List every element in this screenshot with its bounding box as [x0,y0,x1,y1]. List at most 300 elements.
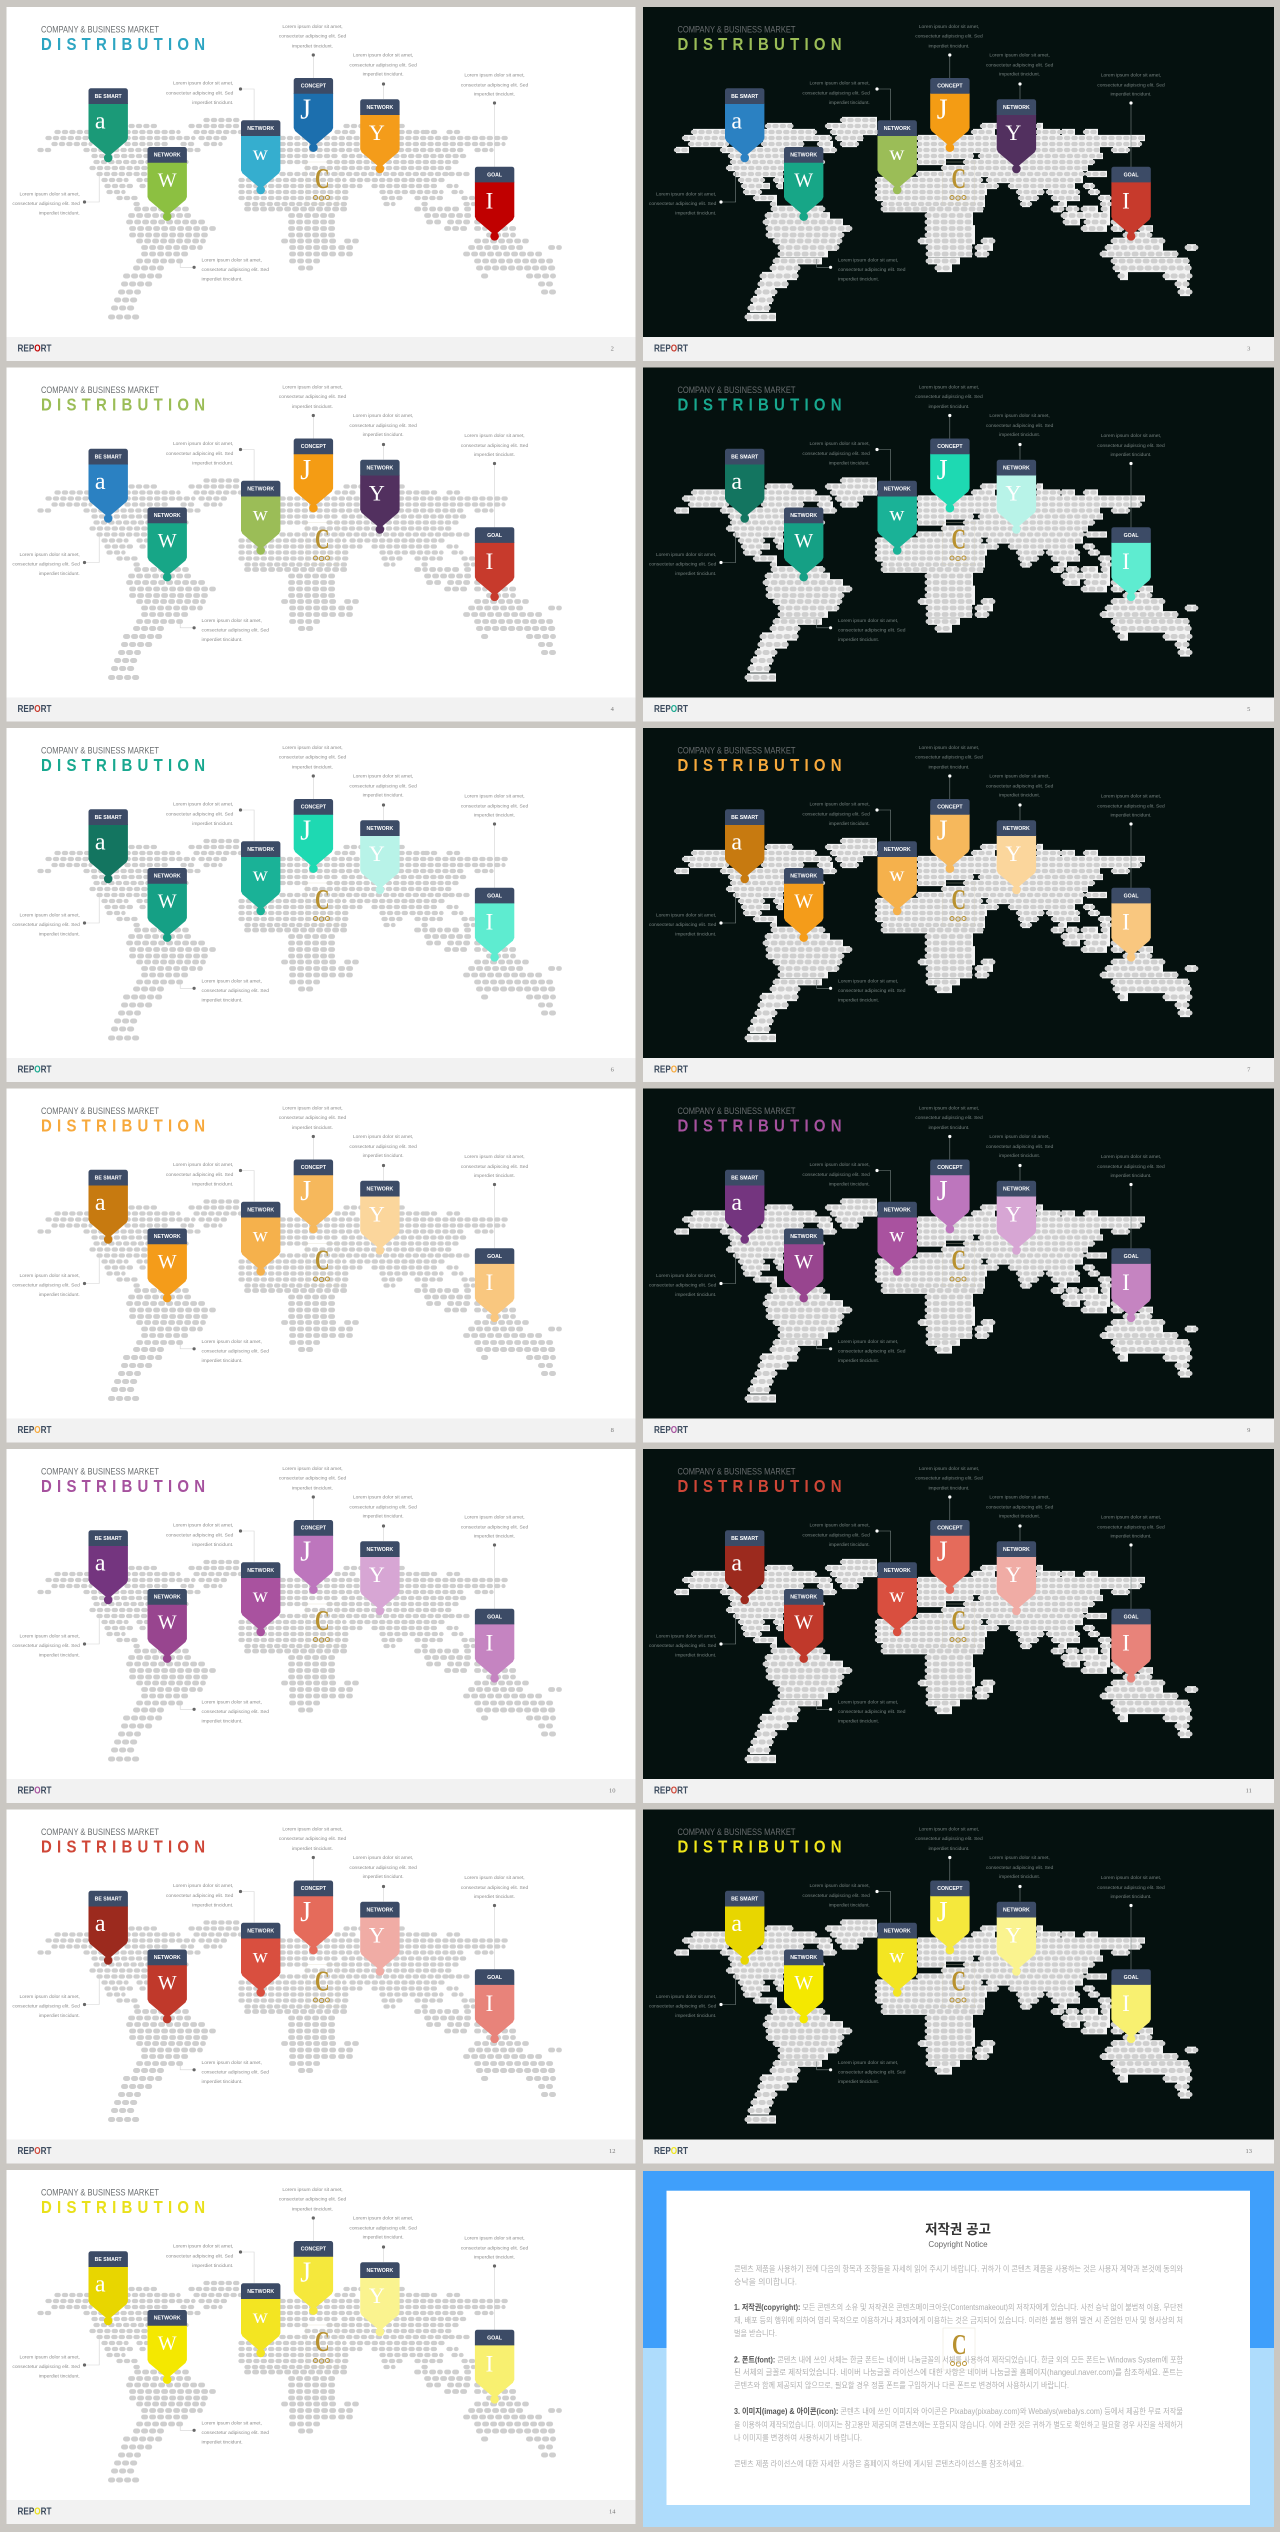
pin: W: W [794,1612,813,1634]
callout: middle left: consectetur adipiscing elit. Sed [166,811,234,817]
footer [6,2140,636,2164]
logo watermark: C [315,2326,330,2358]
pin: W: NETWORK [790,153,817,159]
footer: REPORT [18,343,52,354]
callout: far right: imperdiet tincidunt. [474,2255,515,2261]
pin: w: w [889,862,905,886]
callout: upper right: consectetur adipiscing elit. Sed [349,1865,417,1871]
callout: bottom: consectetur adipiscing elit. Sed [838,2070,906,2076]
pin: w [241,120,280,194]
pin: w [241,481,280,555]
pin: Y: Y [369,481,385,506]
pin: Y [997,1902,1036,1976]
world map [40,2283,560,2480]
pin: Y: Y [369,120,385,145]
footer: REPORT [654,1425,688,1436]
notice body: 1. 저작권(copyright): 모든 콘텐츠의 소유 및 저작권은 콘텐츠메이크아웃(Contentsmakeout)의 저작자에게 있습니다. 사전 승낙 없이 불법적 이용, 무단전 [734,2302,1183,2312]
pin: w: w [253,1944,269,1968]
pin: a: BE SMART [95,94,123,100]
callout: bottom: Lorem ipsum dolor sit amet, [838,978,898,984]
pin: W: W [158,1612,177,1634]
pin: a: BE SMART [731,1175,759,1181]
pin: Y: NETWORK [1003,826,1030,832]
callout: bottom [180,1339,269,1364]
pin: I: I [1122,909,1130,934]
callout: top: consectetur adipiscing elit. Sed [279,2197,346,2203]
pin: I [475,527,514,601]
pin: W: NETWORK [154,874,181,880]
pin: J: J [937,94,948,125]
footer: 12 [609,2148,615,2155]
pin: J [930,1520,970,1594]
callout: bottom: consectetur adipiscing elit. Sed [838,267,906,273]
pin: a [725,449,764,523]
callout: far right: imperdiet tincidunt. [474,1894,515,1900]
notice body: 된 서체의 글꼴로 제작되었습니다. 네이버 나눔글꼴 라이선스에 대한 사항은 네이버 나눔글꼴 홈페이지(hangeul.naver.com)를 참조하세요. 폰트는 [734,2367,1183,2377]
pin: w: w [253,1583,269,1607]
footer: REPORT [654,1785,688,1796]
pin: J [930,1160,970,1233]
footer: 3 [1247,346,1250,352]
pin: J: J [937,1897,948,1928]
callout: far right: Lorem ipsum dolor sit amet, [1101,1514,1161,1520]
pin: w: NETWORK [884,486,911,492]
heading: DISTRIBUTION [678,395,842,415]
pin: w: w [253,2304,269,2328]
heading: COMPANY & BUSINESS MARKET [41,1106,159,1116]
pin: I: GOAL [487,1614,503,1620]
callout: far left [649,1254,736,1298]
pin: I: GOAL [487,893,503,899]
heading: DISTRIBUTION [678,1837,842,1857]
callout: upper right: consectetur adipiscing elit. Sed [986,1504,1054,1510]
callout: bottom: imperdiet tincidunt. [838,1719,879,1725]
heading [41,2187,205,2217]
callout: top: imperdiet tincidunt. [292,1125,333,1131]
callout: top [915,1466,983,1520]
pin: a [88,449,128,523]
callout: bottom: imperdiet tincidunt. [838,2079,879,2085]
callout: far right: Lorem ipsum dolor sit amet, [464,72,525,78]
callout: middle left [802,1883,891,1922]
callout: top [279,1466,346,1520]
pin: a: a [731,108,742,134]
heading: COMPANY & BUSINESS MARKET [678,745,796,755]
pin: J: CONCEPT [937,1526,963,1532]
callout: bottom: consectetur adipiscing elit. Sed [838,988,906,994]
callout: far right: Lorem ipsum dolor sit amet, [464,1154,525,1160]
pin: I: I [1122,1270,1130,1295]
heading: COMPANY & BUSINESS MARKET [41,1827,159,1837]
pin: w: w [253,502,269,526]
pin: J: J [937,1536,948,1567]
footer: 11 [1246,1788,1252,1794]
callout: middle left: Lorem ipsum dolor sit amet, [173,1883,233,1889]
pin: W: NETWORK [154,1595,181,1601]
callout: top: imperdiet tincidunt. [928,43,970,49]
pin: W: NETWORK [154,1955,181,1961]
callout: upper right: consectetur adipiscing elit. Sed [986,1865,1054,1871]
pin: a: BE SMART [95,1896,123,1902]
callout: middle left: imperdiet tincidunt. [829,1182,870,1188]
pin: a: a [731,1190,742,1216]
pin: a: a [95,1190,106,1216]
pin: I: I [1122,1991,1130,2016]
pin: J: J [300,94,311,125]
callout: upper right: Lorem ipsum dolor sit amet, [353,1855,413,1861]
callout: bottom [817,2060,906,2085]
pin: a: BE SMART [731,1536,759,1542]
heading: COMPANY & BUSINESS MARKET [41,2187,159,2197]
callout: bottom: consectetur adipiscing elit. Sed [202,1348,269,1354]
pin: a: a [731,829,742,855]
callout: upper right: consectetur adipiscing elit. Sed [349,2225,417,2231]
logo watermark: C [315,1966,330,1998]
pin: W: W [158,2333,177,2355]
callout: top: consectetur adipiscing elit. Sed [915,1115,983,1121]
pin: W: NETWORK [154,2316,181,2322]
callout: far left: Lorem ipsum dolor sit amet, [656,912,716,918]
pin: I: I [486,1270,493,1295]
pin: J [294,2241,333,2315]
callout: upper right: imperdiet tincidunt. [363,1874,404,1880]
pin: Y: NETWORK [366,2268,394,2274]
callout: bottom: Lorem ipsum dolor sit amet, [202,2060,262,2066]
pin: W [148,1589,187,1663]
pin: a [88,1530,128,1604]
world map [676,1562,1196,1759]
pin: w: w [253,141,269,165]
callout: far left: consectetur adipiscing elit. Sed [649,922,717,928]
pin: J [294,1880,333,1954]
footer [6,698,636,722]
callout: far left: imperdiet tincidunt. [675,571,716,577]
callout: upper right: imperdiet tincidunt. [363,1514,404,1520]
logo watermark: C [952,1605,966,1637]
notice body: 승낙을 의미합니다. [734,2276,797,2286]
pin: J: CONCEPT [301,444,327,450]
pin: w [878,1562,917,1636]
callout: upper right: Lorem ipsum dolor sit amet, [989,52,1050,58]
callout: far left: imperdiet tincidunt. [39,1653,80,1659]
callout: top: imperdiet tincidunt. [292,2206,333,2212]
pin: a: a [95,829,106,855]
footer: REPORT [18,1064,52,1075]
callout: far left: Lorem ipsum dolor sit amet, [656,1994,716,2000]
callout: far right [1097,433,1165,528]
callout: middle left: consectetur adipiscing elit. Sed [802,1532,870,1538]
pin: Y: Y [1005,481,1021,506]
pin: a [88,809,128,883]
callout: far left: imperdiet tincidunt. [675,932,716,938]
pin: I [1111,1248,1151,1322]
pin: a [725,88,764,162]
heading [41,1466,205,1496]
callout: far right: imperdiet tincidunt. [474,1173,515,1179]
footer [643,2140,1274,2164]
pin: w [878,120,917,194]
logo watermark [942,522,974,564]
footer: REPORT [18,1425,52,1436]
pin: Y: NETWORK [366,105,394,111]
pin: w: NETWORK [884,847,911,853]
callout: far right: imperdiet tincidunt. [1110,1894,1152,1900]
footer: 6 [611,1066,615,1074]
heading: DISTRIBUTION [41,756,205,775]
logo watermark [306,522,338,564]
callout: far right: Lorem ipsum dolor sit amet, [1101,1154,1161,1160]
logo watermark [306,1604,338,1646]
callout: upper right [986,773,1054,820]
callout: far left: consectetur adipiscing elit. Sed [649,2004,717,2010]
pin: Y: NETWORK [1003,1186,1030,1192]
callout: bottom [817,618,906,643]
callout: middle left: consectetur adipiscing elit. Sed [166,1532,234,1538]
callout: top: imperdiet tincidunt. [928,1125,970,1131]
logo watermark [942,883,974,925]
pin: I [475,1609,514,1683]
callout: bottom [180,257,269,283]
heading: COMPANY & BUSINESS MARKET [678,1827,796,1837]
panel: slide 10 [6,1449,636,1803]
callout: far left [12,1614,99,1659]
callout: top [915,1826,983,1880]
callout: bottom: Lorem ipsum dolor sit amet, [202,618,262,624]
heading [41,745,205,775]
world map [40,1202,560,1398]
footer: 10 [609,1788,615,1794]
callout: far right: imperdiet tincidunt. [474,452,515,458]
callout: far right: consectetur adipiscing elit. Sed [1097,803,1165,809]
pin: W: W [158,1972,177,1994]
callout: top: imperdiet tincidunt. [928,404,970,410]
footer: 2 [611,346,614,352]
callout: upper right: imperdiet tincidunt. [999,1874,1040,1880]
pin: J [294,1520,333,1594]
pin: Y: NETWORK [1003,1547,1030,1553]
logo watermark: C [952,524,966,556]
pin: W [784,1228,823,1302]
callout: far left: Lorem ipsum dolor sit amet, [19,1994,80,2000]
notice subtitle: Copyright Notice [928,2240,988,2249]
callout: far left [12,532,99,577]
callout: middle left: Lorem ipsum dolor sit amet, [173,80,233,86]
footer: 5 [1247,706,1250,713]
pin: a: BE SMART [95,1536,123,1542]
pin: J: CONCEPT [301,2247,327,2253]
callout: middle left: Lorem ipsum dolor sit amet, [173,1522,233,1528]
pin: w [878,1923,917,1997]
heading: DISTRIBUTION [678,1116,842,1136]
callout: far left: Lorem ipsum dolor sit amet, [656,1273,716,1279]
pin: a: a [731,1550,742,1576]
pin: J [294,1160,333,1233]
pin: Y: NETWORK [366,465,394,471]
logo watermark [943,2328,975,2370]
callout: upper right: consectetur adipiscing elit. Sed [349,423,417,429]
pin: a: BE SMART [731,1896,759,1902]
heading: COMPANY & BUSINESS MARKET [678,1466,796,1476]
callout: far left: imperdiet tincidunt. [39,571,80,577]
callout: bottom [817,1339,906,1364]
callout: far left: imperdiet tincidunt. [39,211,80,217]
pin: W: NETWORK [790,513,817,519]
logo watermark [306,883,338,925]
pin: I: GOAL [487,2335,503,2341]
callout: far left: consectetur adipiscing elit. Sed [12,1282,80,1288]
pin: a: BE SMART [95,2257,123,2263]
panel: slide 13 [643,1810,1274,2164]
pin: Y [360,820,400,894]
callout: upper right [349,773,417,820]
panel: slide 12 [6,1810,636,2164]
pin: W: NETWORK [154,513,181,519]
pin: a: BE SMART [95,454,123,460]
callout: middle left: imperdiet tincidunt. [829,460,870,466]
callout: upper right: Lorem ipsum dolor sit amet, [353,52,413,58]
notice title: 저작권 공고 [925,2222,991,2237]
logo watermark: C [315,1605,330,1637]
panel: copyright notice [643,2171,1274,2527]
callout: far left: consectetur adipiscing elit. Sed [12,2004,80,2010]
heading [678,745,842,775]
callout: upper right: imperdiet tincidunt. [999,72,1040,78]
callout: bottom [180,2420,269,2446]
callout: middle left: consectetur adipiscing elit. Sed [802,1172,870,1178]
callout: far right: consectetur adipiscing elit. Sed [1097,82,1165,88]
callout: middle left: Lorem ipsum dolor sit amet, [173,2243,233,2249]
callout: middle left [802,1522,891,1562]
callout: bottom [817,978,906,1004]
pin: a: BE SMART [95,815,123,821]
pin: Y: Y [369,841,385,866]
callout: bottom: imperdiet tincidunt. [202,637,243,643]
callout: top: Lorem ipsum dolor sit amet, [919,1826,979,1832]
pin: I [475,2330,514,2404]
world map [676,480,1196,678]
callout: far right: consectetur adipiscing elit. Sed [1097,1524,1165,1530]
callout: far right: consectetur adipiscing elit. Sed [1097,443,1165,449]
callout: middle left: imperdiet tincidunt. [192,2263,233,2269]
pin: J: J [937,1176,948,1207]
pin: w: NETWORK [884,1568,911,1574]
callout: far left: Lorem ipsum dolor sit amet, [19,1273,80,1279]
callout: far left: consectetur adipiscing elit. Sed [12,201,80,207]
callout: top: consectetur adipiscing elit. Sed [279,1115,346,1121]
callout: far left: imperdiet tincidunt. [675,2013,716,2019]
callout: far right: Lorem ipsum dolor sit amet, [464,1514,525,1520]
pin: Y: Y [1005,120,1021,145]
logo watermark: C [952,1244,966,1276]
pin: a: BE SMART [95,1175,123,1181]
callout: top [915,1106,983,1160]
callout: middle left: Lorem ipsum dolor sit amet, [809,80,870,86]
pin: I: I [486,909,493,934]
footer [643,337,1274,361]
panel: slide 6 [6,728,636,1082]
callout: top: imperdiet tincidunt. [928,1485,970,1491]
pin: I: I [1122,1630,1130,1655]
callout: top [279,2187,346,2241]
pin: Y: Y [369,1202,385,1227]
callout: middle left: imperdiet tincidunt. [829,1542,870,1548]
pin: a: a [731,1911,742,1937]
callout: far left: imperdiet tincidunt. [39,932,80,938]
callout: middle left: imperdiet tincidunt. [192,1902,233,1908]
callout: upper right: imperdiet tincidunt. [999,1514,1040,1520]
callout: far left: consectetur adipiscing elit. Sed [649,562,717,568]
panel: slide 7 [643,728,1274,1082]
callout: far right: imperdiet tincidunt. [474,92,515,98]
callout: top: Lorem ipsum dolor sit amet, [282,1466,343,1472]
pin: w [241,1562,280,1636]
pin: Y: Y [369,1562,385,1587]
pin: a: BE SMART [731,94,759,100]
logo watermark: C [952,163,966,195]
callout: far left: imperdiet tincidunt. [39,2374,80,2380]
callout: far left: imperdiet tincidunt. [675,1292,716,1298]
callout: middle left: consectetur adipiscing elit. Sed [802,451,870,457]
callout: upper right [349,1855,417,1902]
callout: top: consectetur adipiscing elit. Sed [279,755,346,761]
pin: a: a [95,2271,106,2297]
callout: top: Lorem ipsum dolor sit amet, [282,384,343,390]
pin: J: CONCEPT [937,444,963,450]
pin: w [241,1923,280,1997]
pin: J: CONCEPT [301,84,327,90]
pin: J [294,438,333,512]
pin: Y: NETWORK [366,1907,394,1913]
heading: DISTRIBUTION [678,756,842,775]
callout: top: consectetur adipiscing elit. Sed [915,34,983,40]
pin: J: J [300,1536,311,1567]
pin: w: NETWORK [247,1568,274,1574]
callout: top: Lorem ipsum dolor sit amet, [282,24,343,30]
callout: upper right: Lorem ipsum dolor sit amet, [353,1134,413,1140]
callout: bottom: consectetur adipiscing elit. Sed [202,628,269,634]
callout: middle left: Lorem ipsum dolor sit amet, [173,801,233,807]
logo watermark [306,1244,338,1286]
pin: I: GOAL [487,1975,503,1981]
callout: upper right: consectetur adipiscing elit. Sed [349,1144,417,1150]
callout: middle left: Lorem ipsum dolor sit amet, [809,1162,870,1168]
pin: J: CONCEPT [301,805,327,811]
footer [6,1058,636,1082]
callout: bottom: imperdiet tincidunt. [202,1719,243,1725]
pin: I [475,167,514,241]
pin: J: CONCEPT [301,1526,327,1532]
pin: Y: Y [1005,1923,1021,1948]
panel: slide 5 [643,368,1274,722]
footer: REPORT [18,704,52,715]
pin: Y: NETWORK [1003,465,1030,471]
footer: 9 [1247,1427,1250,1434]
heading: COMPANY & BUSINESS MARKET [41,1466,159,1476]
callout: middle left: consectetur adipiscing elit. Sed [166,1893,234,1899]
callout: top: Lorem ipsum dolor sit amet, [919,384,979,390]
callout: middle left [802,80,891,120]
footer: REPORT [18,2506,52,2517]
callout: bottom: consectetur adipiscing elit. Sed [202,1709,269,1715]
callout: top: imperdiet tincidunt. [928,1846,970,1852]
callout: middle left [166,1522,254,1562]
callout: upper right: imperdiet tincidunt. [363,793,404,799]
pin: J [294,799,333,873]
callout: middle left [166,80,254,120]
callout: upper right [349,1494,417,1541]
callout: middle left: consectetur adipiscing elit. Sed [166,90,234,96]
callout: upper right: Lorem ipsum dolor sit amet, [989,1134,1050,1140]
